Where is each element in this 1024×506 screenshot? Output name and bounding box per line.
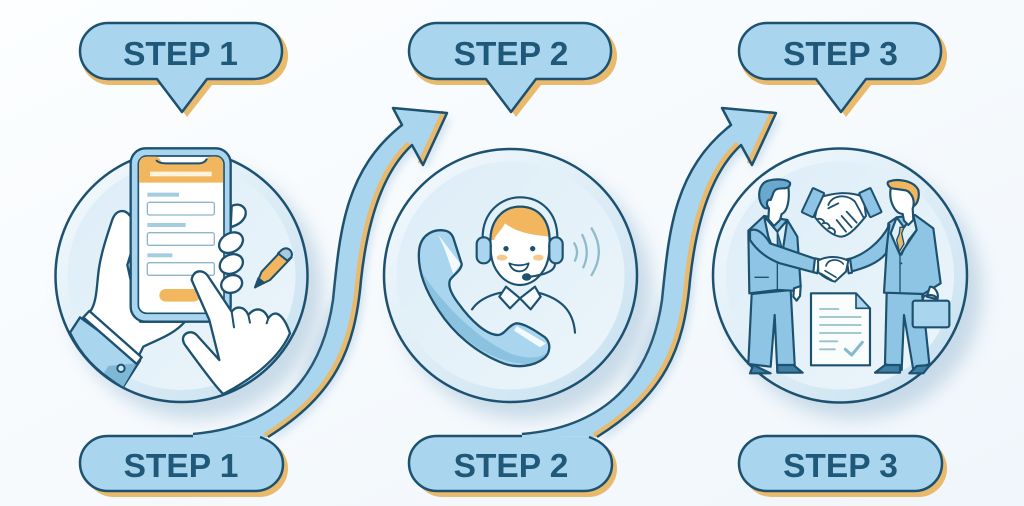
panel: step 1 form on phone (56, 148, 323, 419)
label pill: bottom step 2 (409, 436, 617, 497)
arrow 2: step 2 to step 3 (519, 108, 781, 442)
callout: top step 2 (409, 23, 617, 117)
panel: step 3 agreement (713, 148, 982, 419)
arrow 1: step 1 to step 2 (190, 108, 452, 442)
panel: step 2 phone call (384, 149, 652, 419)
label pill: bottom step 1: STEP 1 (124, 448, 238, 485)
icon: signed contract (811, 293, 870, 365)
callout: top step 3 (739, 23, 947, 117)
callout: top step 1 (80, 23, 288, 117)
icon: support agent with headset (472, 197, 599, 333)
icon: hands holding phone (70, 148, 290, 394)
figure: right businessman with briefcase (847, 180, 949, 373)
icon: pencil (255, 248, 292, 287)
icon: telephone handset (419, 230, 549, 366)
label pill: bottom step 2: STEP 2 (454, 448, 568, 485)
callout: top step 2: STEP 2 (454, 36, 568, 73)
label pill: bottom step 1 (80, 436, 288, 497)
callout: top step 1: STEP 1 (123, 36, 238, 73)
figure: left businessman (748, 179, 819, 373)
icon: clasped hands (818, 257, 848, 282)
callout: top step 3: STEP 3 (783, 36, 898, 73)
icon: small handshake (802, 188, 882, 237)
label pill: bottom step 3: STEP 3 (783, 448, 898, 485)
label pill: bottom step 3 (739, 436, 947, 497)
